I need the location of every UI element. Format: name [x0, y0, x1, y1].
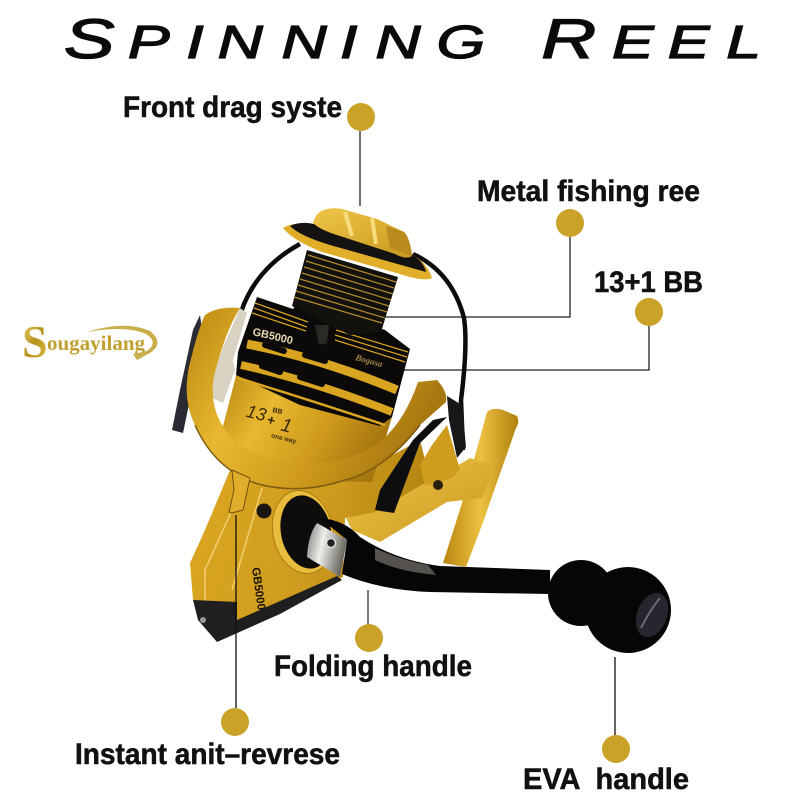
title: I [340, 16, 357, 68]
bearing mark on cylinder: one way [270, 432, 297, 446]
gold cylinder [222, 372, 392, 482]
foot cross brace [345, 458, 495, 542]
rotor [236, 297, 410, 426]
rotor model text: GB5000 [251, 326, 294, 347]
title: N [375, 16, 421, 68]
callout: metal fishing reel: Metal fishing ree [477, 175, 700, 208]
logo: Sougayilang: S [22, 316, 48, 367]
callout: instant anti-reverse [75, 515, 340, 771]
bearing mark on cylinder: + [265, 411, 277, 429]
bearing housing [265, 485, 341, 579]
callout: front drag system: Front drag syste [123, 91, 342, 124]
title: N [218, 16, 263, 68]
title: E [612, 16, 655, 68]
EVA knob [548, 560, 614, 626]
body screw [256, 504, 272, 518]
callout: folding handle: Folding handle [274, 650, 472, 683]
title: E [668, 16, 711, 68]
spool line body [292, 250, 398, 335]
spool gold grooves [294, 255, 396, 323]
rotor badge [315, 325, 329, 345]
spool knob [313, 208, 412, 258]
left black bail piece [172, 315, 203, 433]
title: R [541, 8, 596, 71]
callout: instant anti-reverse: Instant anit–revrese [75, 738, 340, 771]
body facet ridge [205, 488, 262, 603]
body model text: GB5000 [249, 567, 267, 611]
anti-reverse switch [229, 470, 250, 513]
right black lever [375, 417, 447, 513]
title: G [437, 16, 485, 68]
bearing mark on cylinder: 13 [244, 401, 269, 425]
reel illustration [172, 208, 674, 653]
bail wire [241, 244, 465, 450]
callout: metal fishing reel [384, 175, 700, 317]
callout: front drag system [123, 91, 375, 206]
callout: folding handle [274, 590, 472, 683]
reel lower body [190, 440, 430, 642]
logo: Sougayilang [22, 316, 158, 367]
bearing mark on cylinder: BB [272, 407, 283, 416]
title: P [128, 16, 170, 68]
title: N [282, 16, 327, 68]
title: S [64, 8, 115, 71]
silver collar [307, 523, 347, 577]
callout: EVA handle: EVA handle [523, 763, 689, 796]
title: L [726, 16, 761, 68]
knob end cap [630, 588, 674, 642]
arm lower shadow [195, 425, 420, 489]
callout: 13+1 BB [400, 266, 703, 370]
rotor gold bands [238, 303, 408, 425]
silver inner arm [208, 308, 247, 403]
bearing mark on cylinder [241, 401, 303, 446]
title [64, 8, 761, 71]
handle arm [320, 518, 550, 594]
bearing mark on cylinder: 1 [279, 415, 294, 438]
black base [193, 576, 342, 642]
gold bail arm [187, 308, 446, 489]
right gold post [420, 425, 460, 486]
spool flange [283, 224, 432, 279]
rod foot stem [443, 409, 518, 567]
callout: 13+1 BB: 13+1 BB [594, 266, 703, 299]
base screw [200, 617, 206, 623]
logo: Sougayilang: ougayilang [47, 331, 145, 355]
rotor vents [262, 345, 368, 392]
title: I [186, 16, 204, 68]
brand mark: Bogasa [354, 352, 384, 369]
callout: EVA handle [523, 657, 689, 796]
